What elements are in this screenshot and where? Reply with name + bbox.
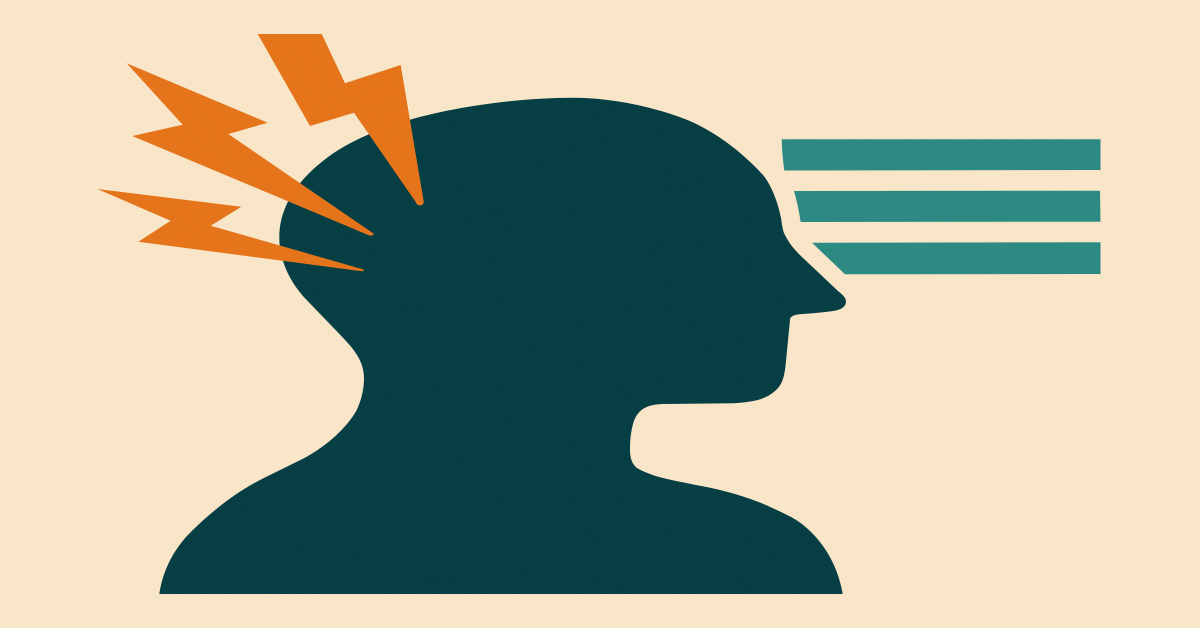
head silhouette [159,98,846,594]
bar: bottom [812,242,1100,274]
lightning bolt: middle [127,63,374,236]
bar: top [782,139,1100,170]
lightning bolt: lower [97,189,364,271]
bars: text lines [782,139,1100,274]
lightning bolt: top [258,34,424,206]
bar: middle [794,191,1100,222]
